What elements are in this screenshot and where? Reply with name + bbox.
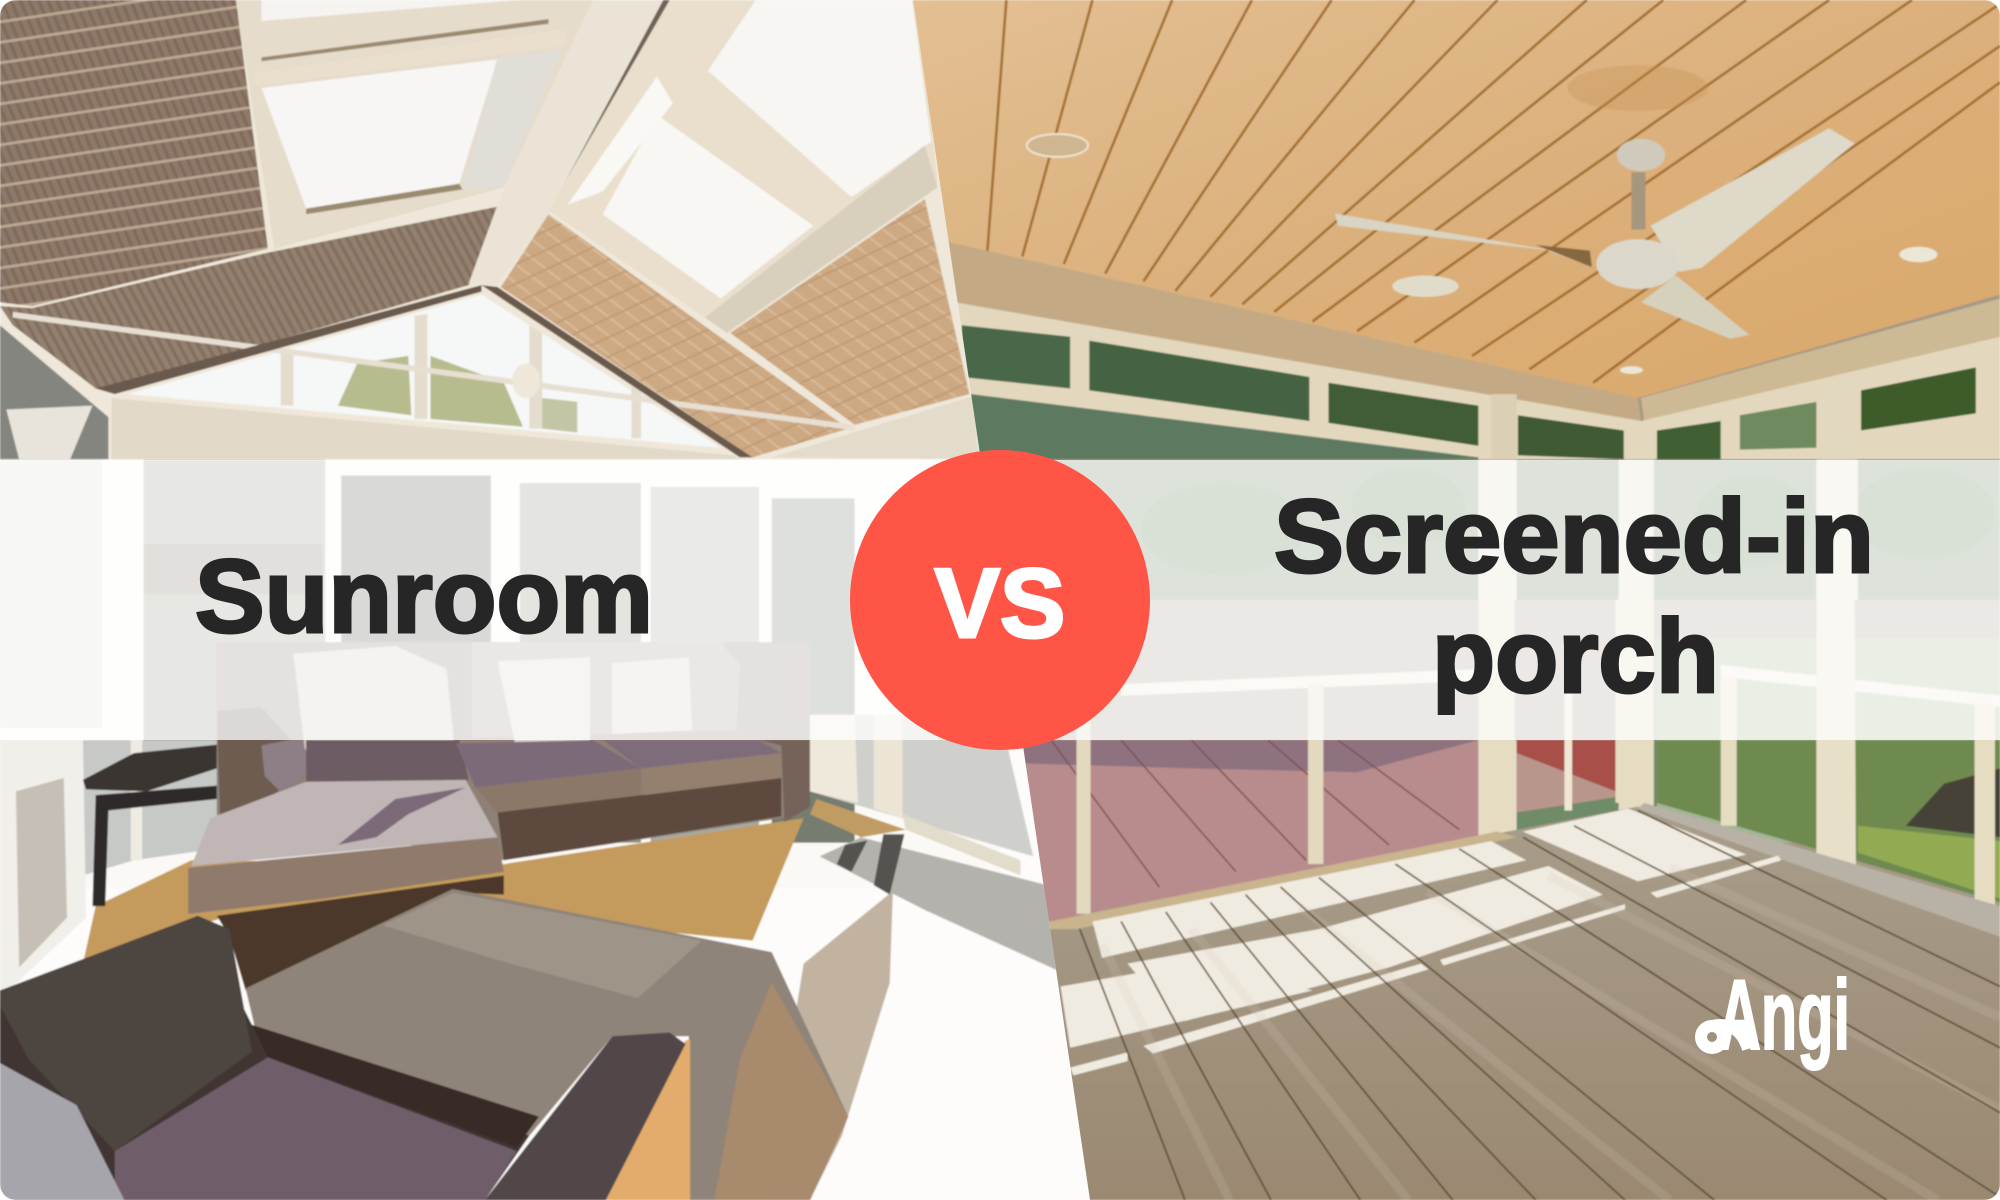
logo: Angi: Angi [1718, 959, 1850, 1070]
lawn [1657, 740, 2000, 902]
post [1619, 460, 1654, 843]
transom window 3 [1518, 415, 1624, 459]
cord pull [512, 364, 540, 398]
seat [115, 1057, 517, 1200]
fringe [252, 1025, 539, 1147]
sofa left arm [218, 708, 290, 814]
tree mottling [1140, 468, 1995, 575]
small light [1620, 366, 1643, 374]
transom window 1 [1089, 341, 1309, 421]
logo: Angi [1701, 959, 1850, 1070]
right beam [1641, 299, 2000, 421]
floor strip [810, 799, 906, 837]
blanket light fold [383, 893, 702, 998]
skylight crossbar shadow [261, 19, 549, 61]
cushion [0, 1063, 124, 1200]
right header [772, 396, 979, 459]
armrest [485, 1032, 686, 1200]
ceiling board lines [987, 0, 2000, 383]
transom window 0 [962, 325, 1070, 388]
pleated lower blind [0, 207, 497, 388]
fan blade left arm [1536, 245, 1592, 267]
rails [1121, 669, 1485, 696]
panel: screened-in porch photo [900, 0, 2000, 1200]
tan blind right [730, 199, 969, 425]
posts [1077, 600, 1091, 914]
deck lines [1051, 740, 1459, 887]
deck shadow [936, 740, 1478, 772]
grey wall [0, 325, 108, 459]
sun shadow strip [765, 891, 893, 1200]
sill [974, 832, 1517, 929]
window beside sofa [83, 740, 217, 876]
fan canopy [1617, 139, 1665, 171]
chaise base [217, 876, 504, 990]
right window 3 [1861, 367, 1976, 431]
deck bench [1166, 724, 1376, 843]
deck beyond [1517, 753, 1615, 812]
side table [83, 745, 217, 906]
right skylight narrow glass [568, 77, 673, 205]
post [1820, 379, 1855, 459]
red bench [1517, 740, 1615, 791]
rug stripe [837, 840, 867, 872]
header beam [112, 398, 740, 459]
chaise shadow [338, 788, 466, 845]
rug stripe [874, 834, 904, 895]
top skylight upper glass [261, 0, 520, 21]
gable window [13, 295, 855, 448]
top skylight glass [261, 59, 497, 209]
door frames [810, 715, 1033, 856]
porch lower [936, 600, 2000, 1200]
fan motor [1596, 239, 1679, 289]
blanket tan edge [714, 983, 848, 1200]
right skylight frame [549, 0, 938, 333]
sunroom ceiling and gable [0, 0, 1020, 459]
armrest wood [606, 1040, 690, 1200]
rafter shadow [568, 0, 670, 176]
ceiling stain [1568, 65, 1708, 111]
gable edge left [96, 285, 482, 394]
lawn band above [1657, 638, 2000, 740]
post [1491, 394, 1517, 459]
sofa base [497, 778, 781, 860]
vs badge: VS [935, 548, 1065, 658]
heading: Screened-in porch: porch [1432, 599, 1719, 715]
panel: sunroom photo [0, 0, 1100, 1200]
post [1816, 460, 1858, 843]
fan blade right [1651, 128, 1855, 272]
armchair underlay [0, 916, 529, 1200]
rug [820, 837, 1084, 983]
translucent title band [0, 460, 2000, 740]
screen below transom [911, 387, 1478, 459]
sill right [1638, 803, 2000, 937]
sofa side pillow [261, 740, 307, 791]
vs badge [850, 450, 1150, 750]
sofa cushion 1 side [475, 768, 641, 812]
blanket [246, 889, 848, 1200]
sofa cushion 2 side [641, 753, 781, 795]
right skylight corner bar [705, 145, 938, 333]
cream frame [911, 295, 2000, 459]
sunlight patches [1061, 809, 1781, 1075]
lawn [1657, 613, 2000, 843]
heading: Screened-in porch [1274, 479, 1874, 715]
wood floor [64, 818, 804, 967]
shrub [1858, 826, 2000, 899]
chaise side [188, 837, 504, 914]
sunroom lower room [0, 642, 1084, 1200]
sofa pillows [294, 646, 693, 751]
upper deck bg [962, 600, 2000, 740]
skylight crossbar [255, 29, 568, 86]
porch garden behind band [911, 460, 2000, 843]
sill [902, 814, 1020, 876]
skylight side strip [462, 50, 561, 188]
armchair back [0, 916, 252, 1151]
floor light grain [1102, 868, 2000, 1200]
sofa right arm [759, 740, 810, 822]
porch ceiling [911, 0, 2000, 459]
sofa back [217, 642, 810, 860]
transom window 2 [1328, 383, 1478, 446]
tan blind [501, 214, 848, 457]
fan rod [1631, 172, 1645, 230]
fan blade bottom [1641, 276, 1749, 339]
wall ornament [6, 406, 92, 459]
top skylight frame [236, 0, 593, 249]
sofa cushion 1 top [456, 740, 641, 788]
recessed light [1027, 134, 1088, 157]
gable edge right [482, 285, 753, 457]
right window 1 [1657, 421, 1721, 459]
ceiling boards [911, 0, 2000, 398]
right window 2 [1740, 402, 1816, 450]
sofa cushion 2 top [603, 740, 781, 768]
radiator cover [0, 740, 86, 990]
dark mulch [1906, 768, 2000, 837]
radiator grille [16, 778, 67, 967]
right skylight lower glass [603, 115, 813, 299]
main rafter [468, 206, 498, 284]
heading: Sunroom: Sunroom [195, 539, 653, 655]
fan blade left [1335, 214, 1590, 266]
skylight bottom shadow [306, 184, 462, 214]
chaise top [191, 780, 497, 866]
fan [1335, 128, 1855, 339]
floor [974, 807, 2000, 1200]
ceiling speaker [1392, 276, 1459, 297]
recessed light [1899, 247, 1938, 262]
sunroom windows behind band [0, 459, 856, 844]
left beam [911, 233, 1641, 421]
red deck [936, 740, 1478, 929]
left dark blind [0, 0, 268, 306]
post [1478, 460, 1517, 843]
right skylight upper glass [708, 0, 931, 197]
heading: Screened-in porch: Screened-in [1274, 479, 1874, 595]
sofa inner seat [306, 740, 469, 784]
floor plank lines [1080, 810, 2000, 1200]
